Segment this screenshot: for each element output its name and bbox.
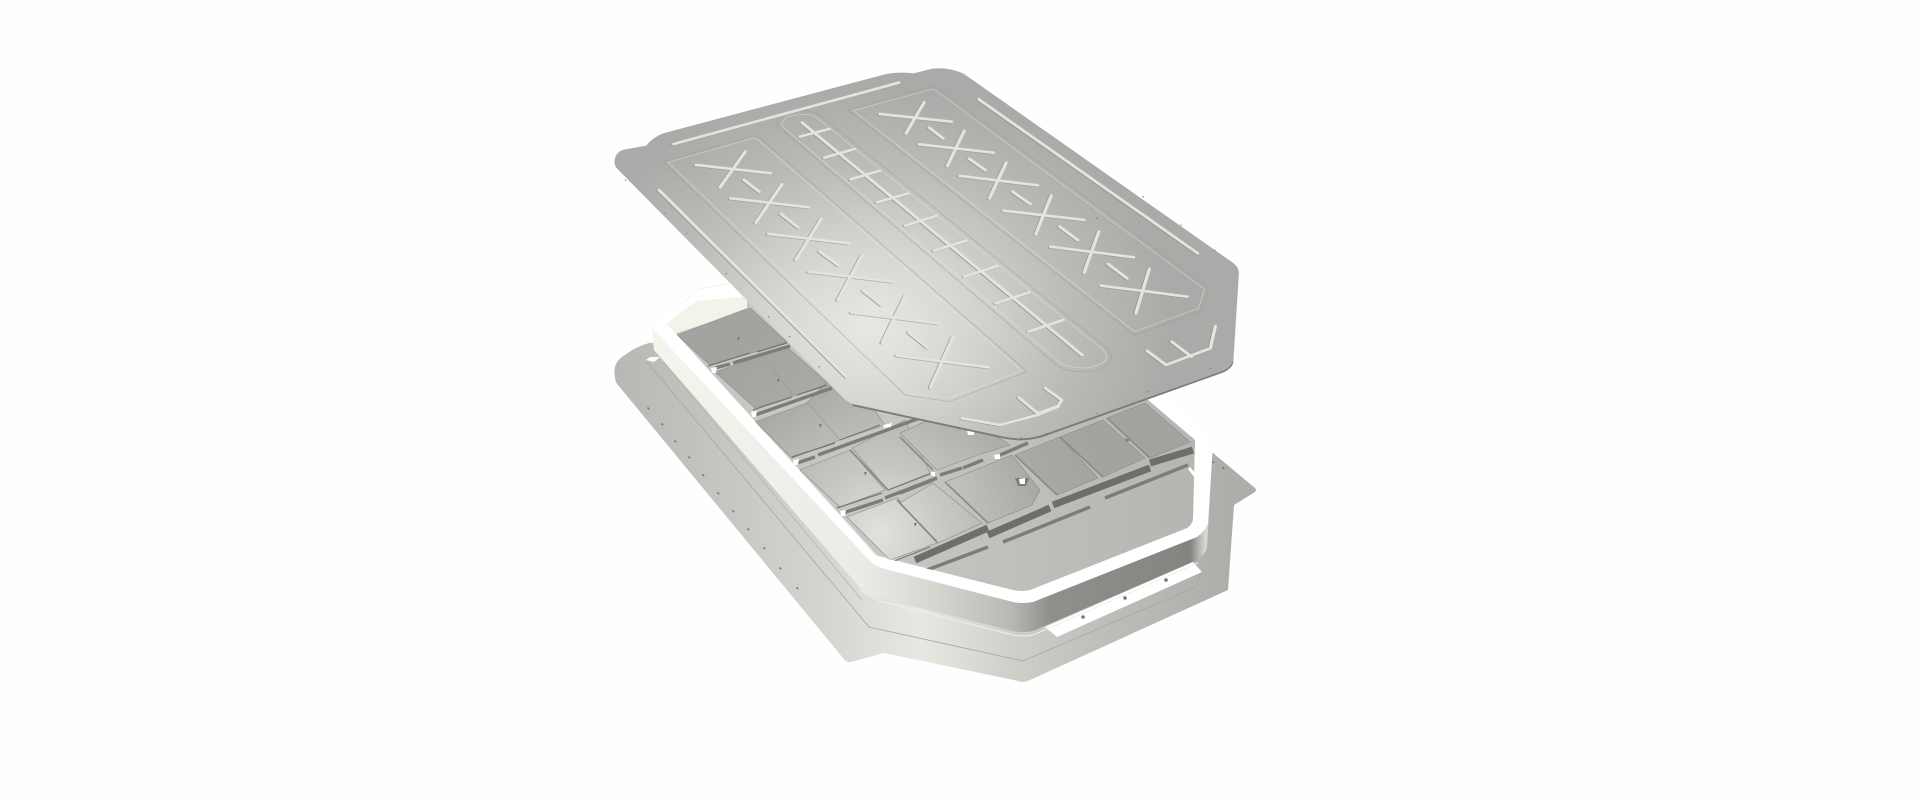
U-shaped ribs (962, 326, 1215, 425)
frame interior floor (672, 300, 1195, 591)
lid panel (615, 68, 1239, 440)
lid outline (615, 68, 1239, 438)
right panel cross ribs (880, 102, 1187, 313)
mounting strip (1045, 562, 1202, 637)
lid underside edge (853, 360, 1233, 440)
left panel cross ribs (696, 152, 988, 387)
frame top rim (652, 280, 1213, 603)
center spine with crossbars (800, 123, 1082, 355)
back inner wall (665, 290, 747, 333)
battery modules (677, 308, 1198, 570)
base plate (614, 340, 1256, 682)
wall lower flange highlight (860, 563, 1198, 636)
pocket outlines (663, 87, 1209, 402)
lid edge fasteners (625, 180, 1215, 438)
frame outer wall (652, 280, 1213, 632)
lower tray assembly (614, 280, 1256, 682)
long ribs (659, 83, 1198, 377)
